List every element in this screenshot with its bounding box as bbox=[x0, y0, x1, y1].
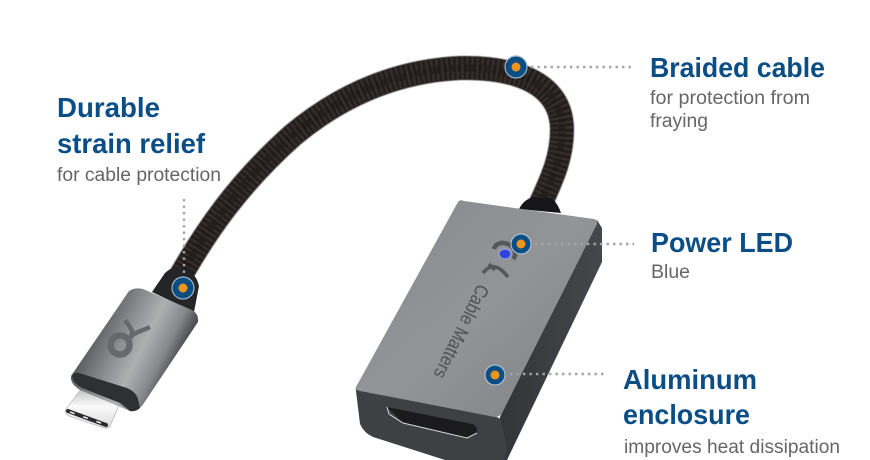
text: durable strain relief bbox=[57, 92, 221, 186]
text: braided cable bbox=[650, 52, 825, 132]
USB-C housing bbox=[71, 288, 198, 411]
callout: braided cable marker bbox=[505, 56, 632, 78]
power LED bbox=[499, 249, 511, 259]
callout: aluminum enclosure marker bbox=[485, 365, 605, 385]
text: power LED: Power LED bbox=[651, 227, 793, 258]
icon: Cable Matters logo on adapter bbox=[483, 243, 515, 277]
USB-C metal tip bbox=[65, 388, 120, 428]
text: braided cable: for protection from bbox=[650, 88, 810, 109]
text: durable strain relief: strain relief bbox=[57, 128, 206, 159]
strain relief: HDMI end bbox=[519, 197, 561, 213]
strain relief: USB-C end bbox=[152, 268, 199, 312]
HDMI port bbox=[387, 407, 477, 438]
text: braided cable: fraying bbox=[650, 111, 708, 132]
callout: power LED marker bbox=[511, 234, 634, 254]
text: aluminum enclosure bbox=[623, 364, 840, 458]
icon: Cable Matters logo on plug bbox=[110, 320, 150, 354]
text: aluminum enclosure: improves heat dissipation bbox=[624, 437, 840, 458]
text: durable strain relief: Durable bbox=[57, 92, 160, 123]
text: aluminum enclosure: Aluminum bbox=[623, 364, 757, 395]
callout: strain relief marker bbox=[172, 199, 194, 299]
cable: braided bbox=[176, 68, 562, 284]
brand name: Cable Matters bbox=[429, 281, 492, 382]
adapter side face bbox=[497, 220, 602, 460]
text: power LED: Blue bbox=[651, 262, 690, 283]
adapter front face bbox=[356, 390, 507, 460]
text: durable strain relief: for cable protection bbox=[57, 165, 221, 186]
text: braided cable: Braided cable bbox=[650, 52, 825, 83]
text: power LED bbox=[651, 227, 793, 283]
HDMI adapter housing bbox=[356, 200, 602, 460]
text: aluminum enclosure: enclosure bbox=[623, 399, 750, 430]
adapter top face bbox=[356, 200, 597, 417]
